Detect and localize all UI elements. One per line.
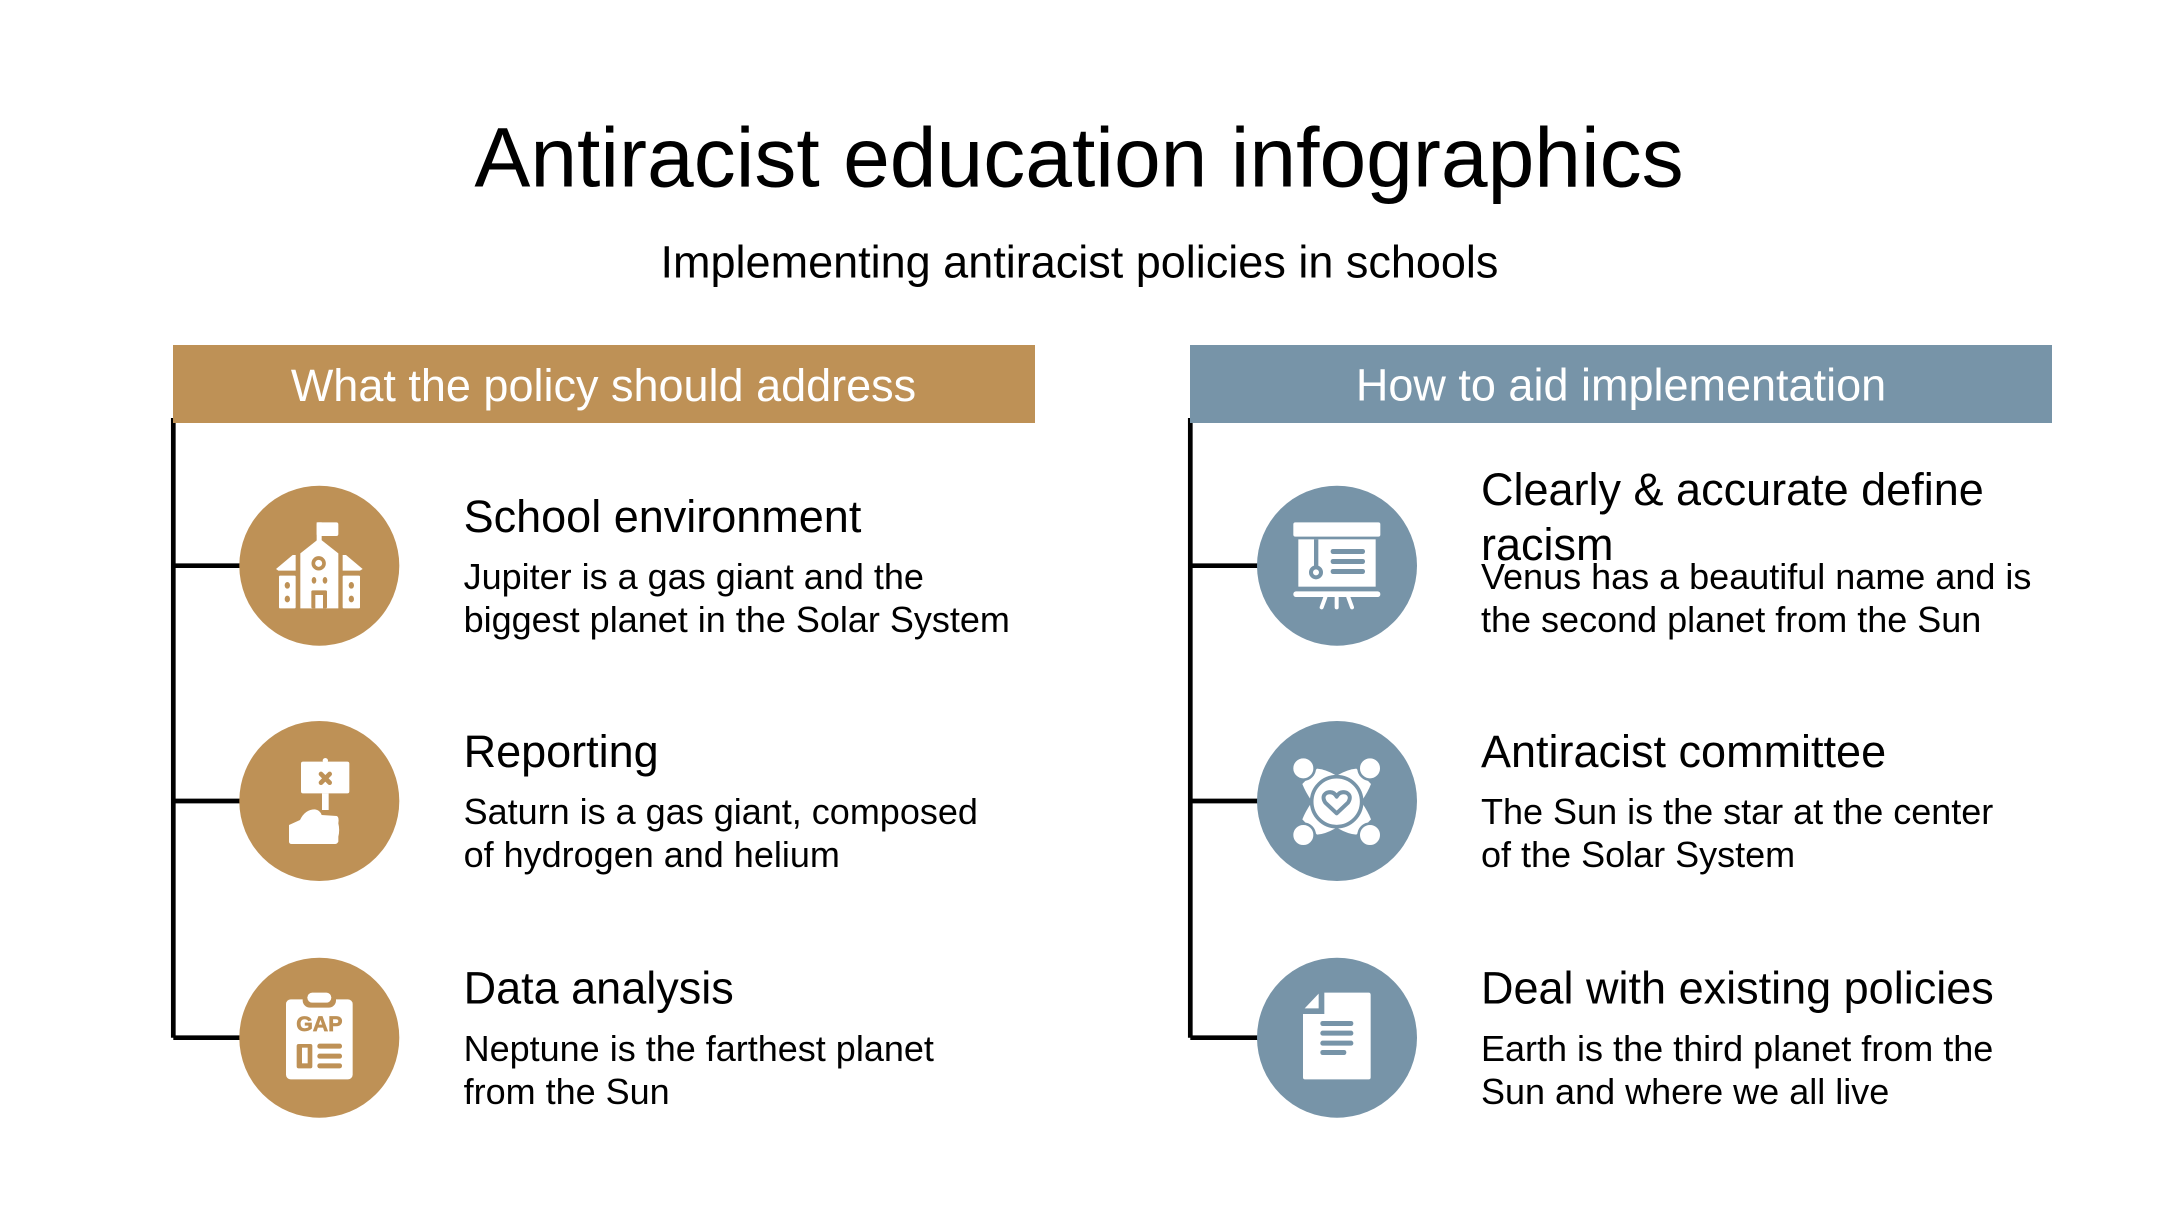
description: antiracist committee: The Sun is the star at the center <box>1481 791 1993 832</box>
description: reporting: Saturn is a gas giant, composed <box>464 791 978 832</box>
item: clearly define racism <box>1257 464 2031 646</box>
header: left: What the policy should address <box>291 360 916 411</box>
heading: clearly define racism: racism <box>1481 519 1614 570</box>
description: deal with existing policies: Earth is the third planet from the <box>1481 1028 1993 1069</box>
icon: gap clipboard: GAP <box>296 1012 342 1036</box>
item: deal with existing policies <box>1257 958 1994 1118</box>
icon: presentation board <box>1257 486 1417 646</box>
description: school environment: biggest planet in the Solar System <box>464 599 1010 640</box>
heading: reporting: Reporting <box>464 726 659 777</box>
item: data analysis <box>239 958 934 1118</box>
heading: deal with existing policies: Deal with existing policies <box>1481 962 1994 1014</box>
subtitle: Implementing antiracist policies in schools <box>661 236 1498 288</box>
description: data analysis: Neptune is the farthest planet <box>464 1028 934 1069</box>
connector tree: left <box>173 418 240 1038</box>
heading: school environment: School environment <box>464 491 862 542</box>
heading: antiracist committee: Antiracist committee <box>1481 726 1886 777</box>
item: antiracist committee <box>1257 721 1993 881</box>
description: deal with existing policies: Sun and where we all live <box>1481 1071 1889 1112</box>
header: left <box>173 345 1035 423</box>
header: right: How to aid implementation <box>1356 360 1886 410</box>
icon: school <box>239 486 399 646</box>
panel: how to aid implementation <box>1190 345 2052 1118</box>
description: clearly define racism: Venus has a beautiful name and is <box>1481 556 2031 597</box>
item: reporting <box>239 721 978 881</box>
title: Antiracist education infographics <box>474 110 1684 204</box>
panel: what the policy should address <box>173 345 1035 1118</box>
description: data analysis: from the Sun <box>464 1071 670 1112</box>
heading: data analysis: Data analysis <box>464 962 734 1014</box>
icon: gap clipboard <box>239 958 399 1118</box>
heading: clearly define racism: Clearly & accurate define <box>1481 464 1984 515</box>
connector tree: right <box>1190 418 1258 1038</box>
icon: committee around heart <box>1257 721 1417 881</box>
icon: document <box>1257 958 1417 1118</box>
header: right <box>1190 345 2052 423</box>
description: clearly define racism: the second planet from the Sun <box>1481 599 1981 640</box>
description: reporting: of hydrogen and helium <box>464 834 840 875</box>
icon: protest sign in hand <box>239 721 399 881</box>
description: school environment: Jupiter is a gas giant and the <box>464 556 924 597</box>
description: antiracist committee: of the Solar System <box>1481 834 1795 875</box>
item: school environment <box>239 486 1010 646</box>
